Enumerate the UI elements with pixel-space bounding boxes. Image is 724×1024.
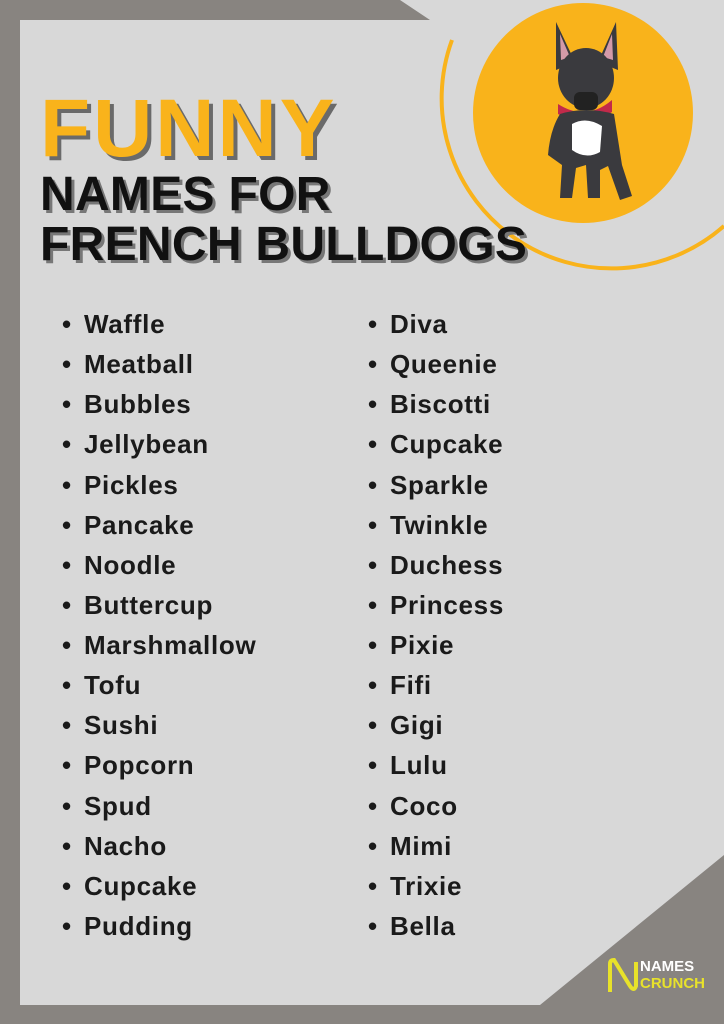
list: right column: Gigi — [390, 710, 443, 740]
list: left column: Tofu — [84, 670, 141, 700]
list: right column: Biscotti — [390, 389, 491, 419]
list: right column: Trixie — [390, 871, 462, 901]
list: left column: Bubbles — [84, 389, 191, 419]
list: left column: Pickles — [84, 470, 179, 500]
list: left column: Pancake — [84, 510, 194, 540]
title: FRENCH BULLDOGS — [40, 218, 527, 271]
list: left column: Nacho — [84, 831, 167, 861]
list: left column: Noodle — [84, 550, 176, 580]
list: left column: Jellybean — [84, 429, 209, 459]
logo: CRUNCH — [640, 975, 705, 992]
list: right column: Duchess — [390, 550, 503, 580]
title: NAMES FOR — [40, 168, 331, 221]
list: left column: Pudding — [84, 911, 193, 941]
list: left column — [62, 309, 256, 941]
list: left column: Spud — [84, 790, 152, 820]
list: right column: Mimi — [390, 831, 452, 861]
list: left column: Waffle — [84, 309, 165, 339]
list: left column: Meatball — [84, 349, 194, 379]
list: left column: Cupcake — [84, 871, 197, 901]
list: right column: Sparkle — [390, 470, 489, 500]
list: left column: Buttercup — [84, 590, 213, 620]
list: left column: Sushi — [84, 710, 158, 740]
list: right column: Princess — [390, 590, 504, 620]
list: right column: Lulu — [390, 750, 448, 780]
icon: dog in yellow circle — [473, 3, 693, 223]
list: right column: Twinkle — [390, 510, 488, 540]
list: left column: Popcorn — [84, 750, 194, 780]
list: right column: Diva — [390, 309, 448, 339]
title — [40, 83, 528, 271]
decorative ring and dog circle — [440, 3, 724, 270]
list: right column: Coco — [390, 790, 458, 820]
list: right column: Bella — [390, 911, 456, 941]
logo: NAMES — [640, 958, 694, 975]
list: right column: Cupcake — [390, 429, 503, 459]
list: right column: Pixie — [390, 630, 454, 660]
title: FUNNY — [40, 83, 337, 174]
logo — [608, 958, 705, 992]
list: right column: Fifi — [390, 670, 432, 700]
list: right column: Queenie — [390, 349, 498, 379]
list: left column: Marshmallow — [84, 630, 256, 660]
list: right column — [368, 309, 504, 941]
